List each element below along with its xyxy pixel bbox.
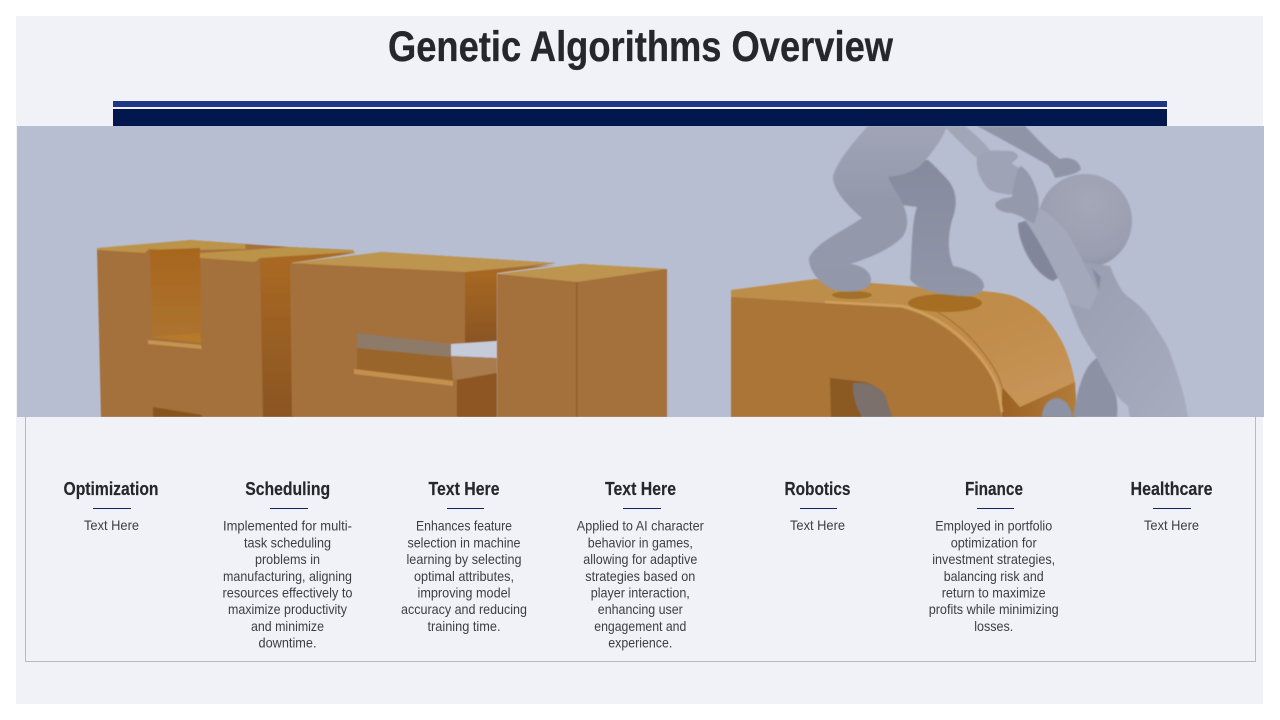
column: Finance: investment strategies, — [932, 551, 1055, 567]
column: Finance: balancing risk and — [944, 568, 1044, 584]
column: Text Here games: experience. — [608, 635, 672, 651]
figure: front arm — [946, 126, 990, 158]
column: Scheduling: manufacturing, aligning — [223, 568, 352, 584]
column: Text Here feature selection: improving model — [418, 584, 510, 600]
figure: lower hand — [1042, 398, 1072, 417]
column: Scheduling: task scheduling — [244, 534, 331, 550]
figure: back arm — [977, 126, 1081, 178]
figure: lower leg — [885, 160, 984, 296]
figure: climbing leg — [1073, 358, 1117, 417]
figure: grasped hand — [976, 150, 1019, 195]
column: Optimization — [64, 479, 158, 533]
column: Scheduling: problems in — [255, 551, 320, 567]
column: Scheduling: Implemented for multi- — [223, 518, 352, 534]
column: Text Here feature selection: optimal attributes, — [414, 568, 514, 584]
column: Scheduling: resources effectively to — [222, 584, 353, 600]
figures helping each other — [809, 126, 1188, 418]
column: Scheduling: and minimize — [251, 618, 324, 634]
column: Text Here games: allowing for adaptive — [583, 551, 697, 567]
column: Healthcare: Text Here — [1144, 517, 1199, 533]
column: Text Here games: strategies based on — [585, 568, 695, 584]
column: Robotics: Robotics — [784, 479, 850, 499]
column: Text Here games: Text Here — [605, 479, 676, 499]
hero image: help letters and figures — [17, 126, 1264, 418]
figure: climbing body — [1067, 262, 1188, 418]
column: Text Here feature selection: Enhances feature — [416, 518, 512, 534]
column: Scheduling: downtime. — [258, 635, 316, 651]
column: Finance: profits while minimizing — [929, 601, 1059, 617]
letter E — [290, 252, 556, 417]
figure: raised hand — [995, 166, 1039, 224]
column: Text Here feature selection: Text Here — [428, 479, 500, 499]
column: Optimization: Text Here — [84, 517, 139, 533]
column: Text Here feature selection: training time. — [428, 618, 500, 634]
column: Finance: Employed in portfolio — [935, 518, 1052, 534]
column: Robotics — [784, 479, 850, 533]
column: Finance: return to maximize — [942, 584, 1046, 600]
figure: raised arm — [1024, 208, 1092, 304]
letter P — [731, 279, 1077, 417]
column: Finance — [929, 479, 1059, 634]
letter H — [97, 240, 355, 417]
column: Text Here feature selection — [401, 479, 527, 634]
column: Text Here games: enhancing user — [598, 601, 683, 617]
column: Text Here games — [577, 479, 704, 651]
column: Healthcare: Healthcare — [1130, 479, 1212, 499]
figure: head — [1038, 174, 1132, 268]
figure: arm shadow slit — [1093, 270, 1101, 288]
figure: upper leg and torso — [809, 126, 947, 292]
column: Text Here games: Applied to AI character — [577, 518, 704, 534]
column: Text Here feature selection: selection in machine — [408, 534, 521, 550]
column: Text Here games: player interaction, — [591, 584, 690, 600]
column: Scheduling: Scheduling — [245, 479, 330, 499]
column: Text Here games: engagement and — [594, 618, 686, 634]
header bars — [113, 101, 1167, 126]
column: Scheduling: maximize productivity — [228, 601, 347, 617]
column: Finance: optimization for — [951, 534, 1037, 550]
figure: head lower lobe — [1018, 220, 1058, 282]
panel: applications — [26, 417, 1256, 662]
column: Finance: losses. — [974, 618, 1013, 634]
panel border — [26, 417, 1256, 662]
column: Optimization: Optimization — [64, 479, 158, 499]
column: Robotics: Text Here — [790, 517, 845, 533]
column: Healthcare — [1130, 479, 1212, 533]
column: Text Here games: behavior in games, — [588, 534, 693, 550]
letter L — [497, 264, 667, 417]
column: Scheduling — [222, 479, 353, 651]
column: Finance: Finance — [965, 479, 1023, 499]
column: Text Here feature selection: learning by selecting — [406, 551, 522, 567]
column: Text Here feature selection: accuracy and reducing — [401, 601, 527, 617]
title: Genetic Algorithms Overview — [388, 24, 894, 71]
